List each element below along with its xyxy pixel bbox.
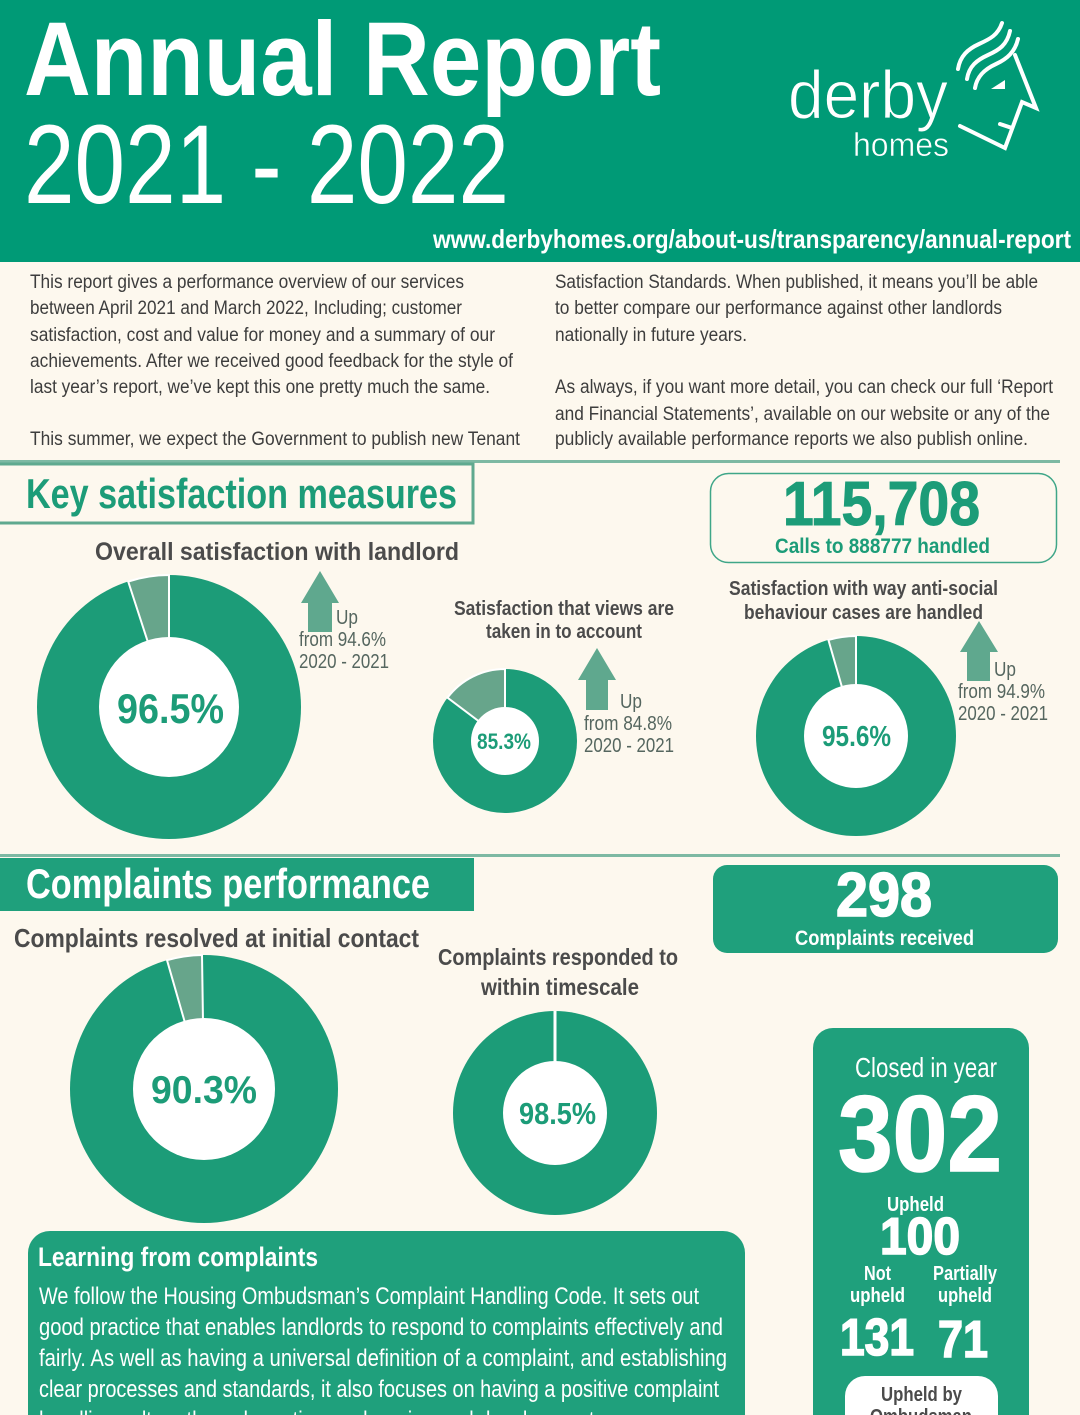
chart: anti-social behaviour satisfaction: behaviour cases are handled xyxy=(744,602,983,624)
arrow and comparison: overall satisfaction: 2020 - 2021 xyxy=(299,651,389,673)
chart: satisfaction that views are taken into account xyxy=(433,598,674,813)
panel: closed in year: Upheld xyxy=(887,1194,944,1216)
intro text: publicly available performance reports we also publish online. xyxy=(555,429,1028,450)
panel: closed in year: Partially xyxy=(933,1263,998,1285)
title: 2021 - 2022 xyxy=(24,102,509,227)
intro text: last year’s report, we’ve kept this one pretty much the same. xyxy=(30,377,490,398)
chart: complaints responded to within timescale xyxy=(438,944,678,1215)
panel: learning from complaints: We follow the Housing Ombudsman’s Complaint Handling Code. It sets out xyxy=(39,1283,699,1310)
panel: closed in year: Not xyxy=(864,1263,891,1285)
arrow and comparison: anti-social behaviour: 2020 - 2021 xyxy=(958,703,1048,725)
chart: satisfaction that views are taken into account: taken in to account xyxy=(486,621,642,643)
title: Annual Report xyxy=(24,1,661,118)
chart: overall satisfaction with landlord: Overall satisfaction with landlord xyxy=(95,538,459,566)
upheld by ombudsman box xyxy=(845,1376,998,1415)
panel: learning from complaints: Learning from complaints xyxy=(38,1242,318,1272)
heading: complaints performance: Complaints performance xyxy=(26,860,430,907)
panel: learning from complaints xyxy=(28,1231,745,1415)
intro text: between April 2021 and March 2022, Including; customer xyxy=(30,298,463,319)
chart: anti-social behaviour satisfaction: 95.6% xyxy=(822,721,891,753)
chart: complaints resolved at initial contact: 90.3% xyxy=(151,1069,257,1112)
callout: complaints received: Complaints received xyxy=(795,927,974,950)
chart: complaints resolved at initial contact: Complaints resolved at initial contact xyxy=(14,923,419,953)
header banner xyxy=(0,0,1080,262)
callout: complaints received: 298 xyxy=(836,861,932,930)
arrow and comparison: views xyxy=(578,648,674,757)
arrow and comparison: views: Up xyxy=(620,691,642,713)
title xyxy=(24,1,661,227)
arrow and comparison: views: 2020 - 2021 xyxy=(584,735,674,757)
panel: closed in year xyxy=(813,1028,1029,1415)
intro text: achievements. After we received good feedback for the style of xyxy=(30,351,514,372)
logo: derby homes xyxy=(788,23,1036,163)
arrow and comparison: overall satisfaction: Up xyxy=(336,607,358,629)
heading: key satisfaction measures xyxy=(0,464,473,523)
panel: learning from complaints: good practice that enables landlords to respond to complaints effectively and xyxy=(39,1314,723,1341)
panel: closed in year: upheld xyxy=(850,1285,905,1307)
intro text: nationally in future years. xyxy=(555,325,747,346)
chart: complaints responded to within timescale: Complaints responded to xyxy=(438,944,678,970)
chart: anti-social behaviour satisfaction xyxy=(729,578,998,836)
intro text: This report gives a performance overview of our services xyxy=(30,272,464,293)
chart: overall satisfaction with landlord xyxy=(37,538,459,839)
arrow and comparison: overall satisfaction: from 94.6% xyxy=(299,629,386,651)
heading: key satisfaction measures: Key satisfaction measures xyxy=(26,470,457,517)
chart: overall satisfaction with landlord: 96.5% xyxy=(117,685,224,732)
panel: learning from complaints: fairly. As well as having a universal definition of a complaint, and establishing xyxy=(39,1345,727,1372)
panel: closed in year: 100 xyxy=(880,1208,960,1266)
chart: satisfaction that views are taken into account: Satisfaction that views are xyxy=(454,598,674,620)
callout: calls handled: Calls to 888777 handled xyxy=(775,535,990,558)
chart: complaints responded to within timescale: within timescale xyxy=(480,974,639,1000)
intro text: to better compare our performance against other landlords xyxy=(555,298,1002,319)
arrow and comparison: overall satisfaction xyxy=(299,571,389,673)
panel: closed in year: Closed in year xyxy=(855,1052,997,1083)
panel: closed in year: 131 xyxy=(840,1309,914,1367)
logo: derby homes: homes xyxy=(853,126,949,163)
panel: closed in year: upheld xyxy=(938,1285,992,1307)
arrow and comparison: views: from 84.8% xyxy=(584,713,672,735)
intro text: This summer, we expect the Government to publish new Tenant xyxy=(30,429,521,450)
panel: learning from complaints: clear processes and standards, it also focuses on having a positive complaint xyxy=(39,1376,719,1403)
chart: complaints resolved at initial contact xyxy=(14,923,419,1223)
arrow and comparison: anti-social behaviour: from 94.9% xyxy=(958,681,1045,703)
upheld by ombudsman box: Upheld by xyxy=(881,1384,963,1406)
callout: calls handled: 115,708 xyxy=(783,470,980,539)
chart: complaints responded to within timescale: 98.5% xyxy=(519,1096,596,1131)
panel: closed in year: 302 xyxy=(838,1073,1002,1194)
logo: derby homes: derby xyxy=(788,57,948,133)
callout: complaints received xyxy=(713,861,1058,953)
chart: anti-social behaviour satisfaction: Satisfaction with way anti-social xyxy=(729,578,998,600)
chart: satisfaction that views are taken into account: 85.3% xyxy=(477,729,531,754)
intro text: Satisfaction Standards. When published, it means you’ll be able xyxy=(555,272,1038,293)
arrow and comparison: anti-social behaviour: Up xyxy=(994,659,1016,681)
callout: calls handled xyxy=(710,470,1056,562)
intro text: satisfaction, cost and value for money and a summary of our xyxy=(30,325,496,346)
panel: closed in year: 71 xyxy=(938,1311,988,1369)
intro text xyxy=(30,272,1054,450)
arrow and comparison: anti-social behaviour xyxy=(958,621,1048,725)
